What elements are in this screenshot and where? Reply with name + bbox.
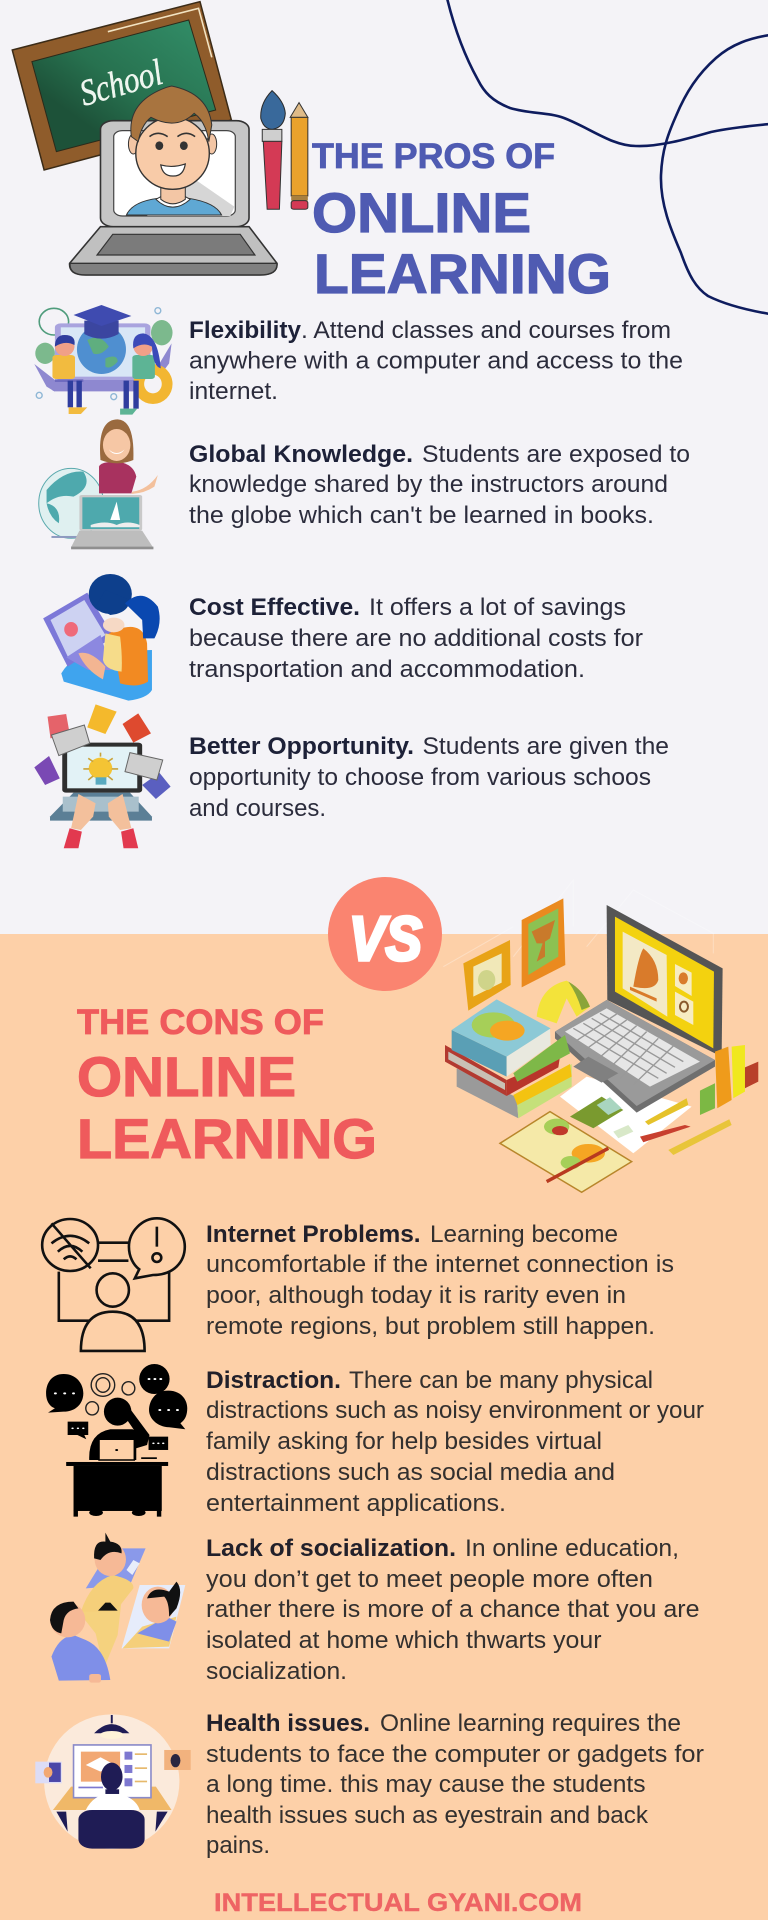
text: internet problems	[206, 1221, 674, 1340]
text: distraction: Distraction.	[206, 1367, 341, 1394]
background: pale top section	[0, 0, 768, 934]
text: distraction: distractions such as social media and	[206, 1459, 615, 1486]
text: global knowledge: Global Knowledge.	[189, 441, 413, 468]
title: the pros of online learning: LEARNING	[314, 242, 611, 305]
icon: lack of socialization, video call people	[50, 1533, 185, 1683]
text: flexibility	[189, 317, 683, 405]
panel: cons list	[35, 1218, 704, 1859]
text: flexibility: internet.	[189, 378, 278, 405]
text: distraction: There can be many physical	[349, 1367, 653, 1394]
icon: cost effective, students at laptop	[43, 574, 160, 701]
text: health issues: Online learning requires the	[380, 1710, 681, 1737]
badge: VS circle: VS	[349, 905, 422, 974]
text: lack of socialization: isolated at home which thwarts your	[206, 1627, 602, 1654]
title: the cons of online learning	[77, 1003, 377, 1170]
text: internet problems: uncomfortable if the internet connection is	[206, 1251, 674, 1278]
illustration: school chalkboard and student on laptop	[12, 2, 308, 275]
text: global knowledge: the globe which can't be learned in books.	[189, 502, 654, 529]
text: global knowledge: knowledge shared by the instructors around	[189, 471, 668, 498]
icon: laptop with student	[70, 86, 277, 275]
text: lack of socialization	[206, 1535, 700, 1685]
icon: internet problems, person at monitor with broken wifi	[42, 1218, 185, 1351]
text: lack of socialization: you don’t get to meet people more often	[206, 1566, 653, 1593]
text: better opportunity	[189, 733, 669, 822]
text: health issues: a long time. this may cause the students	[206, 1771, 646, 1798]
text: distraction: entertainment applications.	[206, 1490, 506, 1517]
text: flexibility: . Attend classes and courses from	[301, 317, 671, 344]
text: cost effective: Cost Effective.	[189, 594, 360, 621]
title: the cons of online learning: ONLINE	[77, 1045, 296, 1108]
text: global knowledge	[189, 441, 690, 529]
text: internet problems: Internet Problems.	[206, 1221, 421, 1248]
icon: global knowledge, teacher with globe and laptop	[39, 419, 158, 549]
icon: better opportunity, laptop with idea bulb and books	[34, 704, 171, 848]
text: better opportunity: opportunity to choose from various schoos	[189, 764, 651, 791]
text: internet problems: remote regions, but problem still happen.	[206, 1313, 655, 1340]
text: better opportunity: and courses.	[189, 795, 326, 822]
text: distraction	[206, 1367, 704, 1517]
text: distraction: distractions such as noisy environment or your	[206, 1397, 704, 1424]
text: cost effective: because there are no additional costs for	[189, 625, 643, 652]
text: lack of socialization: socialization.	[206, 1658, 347, 1685]
text: lack of socialization: In online education,	[465, 1535, 679, 1562]
text: global knowledge: Students are exposed to	[422, 441, 690, 468]
icon: paint brush	[261, 91, 285, 209]
icon: distraction, person at desk with speech bubbles	[46, 1364, 187, 1517]
icon: pencil	[290, 103, 308, 209]
text: lack of socialization: Lack of socialization.	[206, 1535, 456, 1562]
illustration: isometric laptop with books	[443, 880, 758, 1192]
footer: website credit: INTELLECTUAL GYANI.COM	[214, 1889, 582, 1917]
panel: pros list	[34, 305, 690, 848]
title: the pros of online learning: ONLINE	[312, 181, 531, 244]
icon: health issues, person at screen under lamp	[35, 1714, 191, 1849]
text: health issues: students to face the computer or gadgets for	[206, 1741, 704, 1768]
text: distraction: family asking for help besides virtual	[206, 1428, 602, 1455]
background: peach bottom section	[0, 934, 768, 1920]
text: health issues: health issues such as eyestrain and back	[206, 1802, 649, 1829]
title: the cons of online learning: LEARNING	[77, 1107, 377, 1170]
text: cost effective: It offers a lot of savings	[369, 594, 626, 621]
chalkboard word: School	[75, 52, 167, 115]
text: cost effective: transportation and accommodation.	[189, 656, 585, 683]
text: health issues: Health issues.	[206, 1710, 370, 1737]
text: flexibility: Flexibility	[189, 317, 302, 344]
text: health issues	[206, 1710, 704, 1859]
badge: VS circle	[328, 877, 442, 991]
text: internet problems: poor, although today it is rarity even in	[206, 1282, 626, 1309]
decorative curves top right	[447, 0, 768, 314]
icon: flexibility, students with globe	[34, 305, 173, 415]
title: the pros of online learning: THE PROS OF	[312, 137, 555, 176]
text: better opportunity: Students are given the	[422, 733, 669, 760]
text: better opportunity: Better Opportunity.	[189, 733, 414, 760]
title: the cons of online learning: THE CONS OF	[77, 1003, 324, 1042]
text: internet problems: Learning become	[430, 1221, 618, 1248]
icon: chalkboard	[12, 2, 231, 170]
text: flexibility: anywhere with a computer and access to the	[189, 348, 683, 374]
text: lack of socialization: rather there is more of a chance that you are	[206, 1596, 700, 1623]
title: the pros of online learning	[312, 137, 611, 305]
text: cost effective	[189, 594, 643, 683]
text: health issues: pains.	[206, 1832, 270, 1859]
